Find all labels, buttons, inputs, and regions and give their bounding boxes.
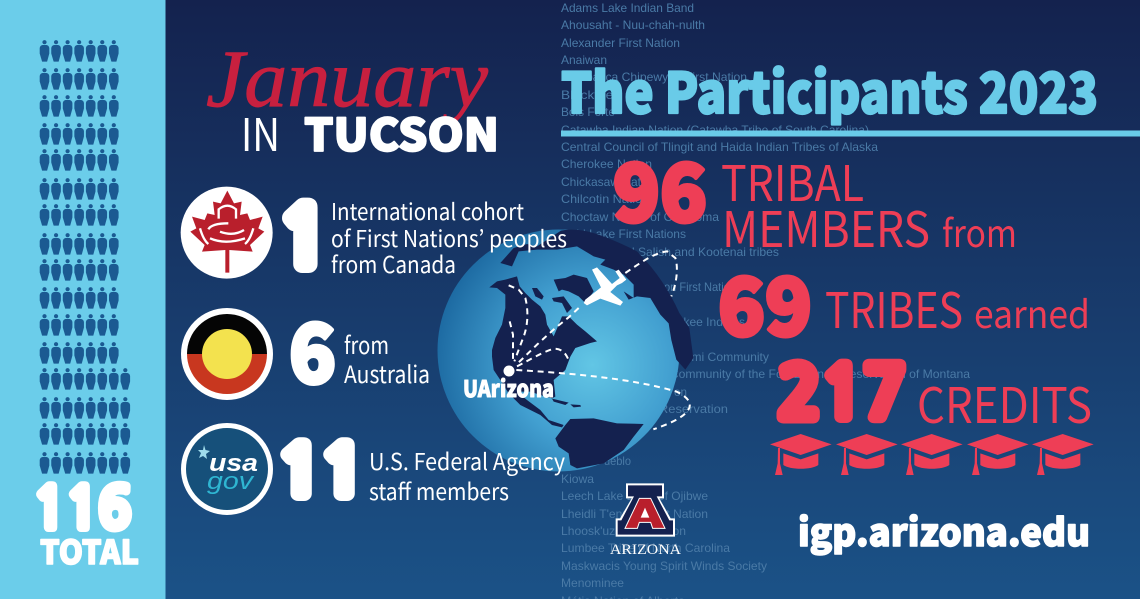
row: U.S. Federal bbox=[184, 426, 565, 512]
stat: 217 credits: 217 bbox=[778, 360, 906, 428]
list of participating tribes: Adams Lake Indian Band bbox=[561, 1, 694, 15]
number 11: 11 bbox=[278, 438, 364, 504]
list of participating tribes: Alexander First Nation bbox=[561, 36, 680, 50]
list of participating tribes: Catawba Indian Nation (Catawba Tribe of South Carolina) bbox=[561, 123, 869, 137]
list of participating tribes: Blackfeet bbox=[561, 88, 618, 102]
text: international cohort: of First Nations’ peoples bbox=[331, 220, 567, 254]
row: Canada cohort bbox=[181, 187, 567, 280]
list of participating tribes: Lheidli T'enneh First Nation bbox=[561, 507, 708, 521]
text: international cohort: International cohort bbox=[331, 193, 524, 227]
panel: left sidebar bbox=[0, 0, 166, 599]
text: federal staff: staff members bbox=[369, 473, 509, 507]
stat: 96 tribal members: 96 bbox=[613, 130, 707, 246]
stat: 217 credits bbox=[778, 360, 1092, 438]
text: from Australia: from bbox=[344, 326, 389, 361]
total count: 116 bbox=[33, 482, 131, 537]
list of participating tribes: Confederated Salish and Kootenai tribes bbox=[561, 245, 779, 259]
list of participating tribes: Bois Forte bbox=[561, 105, 615, 119]
text: from Australia bbox=[344, 326, 430, 390]
icon: USA gov badge: usa bbox=[209, 450, 258, 477]
heading: in Tucson: TUCSON bbox=[304, 99, 499, 164]
icon: Canadian maple leaf badge bbox=[181, 187, 273, 279]
icons: graduation caps bbox=[770, 434, 1094, 475]
text: federal staff bbox=[369, 443, 565, 507]
stat: 69 tribes: earned bbox=[974, 284, 1090, 339]
text: from Australia: Australia bbox=[344, 355, 430, 390]
list of participating tribes: Chickasaw Nation bbox=[561, 175, 657, 189]
list of participating tribes: Ahousaht - Nuu-chah-nulth bbox=[561, 18, 705, 32]
list of participating tribes: Leech Lake Band of Ojibwe bbox=[561, 489, 708, 503]
icon: airplane bbox=[584, 267, 626, 306]
list of participating tribes: Kiowa bbox=[561, 472, 594, 486]
list of participating tribes: Cold Lake First Nations bbox=[561, 227, 686, 241]
stat: 69 tribes bbox=[718, 244, 1090, 360]
list of participating tribes: Menominee bbox=[561, 576, 624, 590]
heading rule bbox=[561, 130, 1140, 136]
list of participating tribes: Chilcotin Nation bbox=[561, 192, 649, 206]
list of participating tribes bbox=[561, 1, 970, 599]
stat: 96 tribal members: MEMBERS bbox=[722, 191, 930, 262]
stat: 69 tribes: 69 bbox=[718, 244, 812, 360]
flight paths bbox=[509, 251, 690, 429]
row: Australia bbox=[181, 288, 430, 407]
icon: Aboriginal flag badge bbox=[181, 308, 273, 400]
heading: in Tucson: IN bbox=[241, 99, 280, 164]
University of Arizona logo bbox=[610, 483, 681, 558]
list of participating tribes: Eastern Band of Cherokee Indians bbox=[561, 315, 745, 329]
globe bbox=[438, 230, 693, 472]
stat: 96 tribal members: TRIBAL bbox=[721, 145, 864, 216]
stat: 217 credits: CREDITS bbox=[917, 367, 1092, 438]
text: international cohort: from Canada bbox=[331, 246, 456, 280]
heading: January: January bbox=[206, 33, 489, 124]
text: international cohort bbox=[331, 193, 567, 280]
list of participating tribes: Fort Peck Indian Reservation bbox=[561, 402, 728, 416]
list of participating tribes: Anaiwan bbox=[561, 53, 607, 67]
list of participating tribes: Cherokee Nation bbox=[561, 157, 652, 171]
text: federal staff: U.S. Federal Agency bbox=[369, 443, 565, 477]
website url: igp.arizona.edu bbox=[798, 502, 1090, 557]
list of participating tribes: Choctaw Nation of Oklahoma bbox=[561, 210, 719, 224]
list of participating tribes: Lhoosk'uz Dené Nation bbox=[561, 524, 686, 538]
University of Arizona logo: ARIZONA bbox=[610, 542, 681, 558]
total label: TOTAL bbox=[40, 526, 139, 574]
origin marker bbox=[504, 366, 514, 376]
list of participating tribes: Lumbee Tribe of North Carolina bbox=[561, 541, 730, 555]
list of participating tribes: Fort Belknap Indian Community of the Fort Belknap Reservation of Montana bbox=[561, 367, 970, 381]
list of participating tribes: on First Nation bbox=[664, 280, 736, 294]
list of participating tribes: Central Council of Tlingit and Haida Indian Tribes of Alaska bbox=[561, 140, 878, 154]
number 1: 1 bbox=[280, 199, 327, 277]
list of participating tribes: Maskwacis Young Spirit Winds Society bbox=[561, 559, 767, 573]
people pictogram grid bbox=[40, 40, 130, 474]
stat: 96 tribal members: from bbox=[942, 203, 1017, 258]
list of participating tribes: on bbox=[674, 385, 687, 399]
icon: USA gov badge bbox=[184, 426, 270, 512]
stat: 96 tribal members bbox=[613, 130, 1017, 262]
icon: USA gov badge: gov bbox=[207, 468, 255, 495]
stat: 69 tribes: TRIBES bbox=[825, 272, 963, 343]
list of participating tribes: Athabasca Chipewyan First Nation bbox=[561, 70, 747, 84]
continents bbox=[489, 230, 693, 468]
number 6: 6 bbox=[289, 288, 336, 407]
list of participating tribes: Jemez Pueblo bbox=[561, 454, 631, 468]
label: UArizona: UArizona bbox=[463, 370, 554, 404]
list of participating tribes: Forest County Potawatomi Community bbox=[561, 350, 769, 364]
